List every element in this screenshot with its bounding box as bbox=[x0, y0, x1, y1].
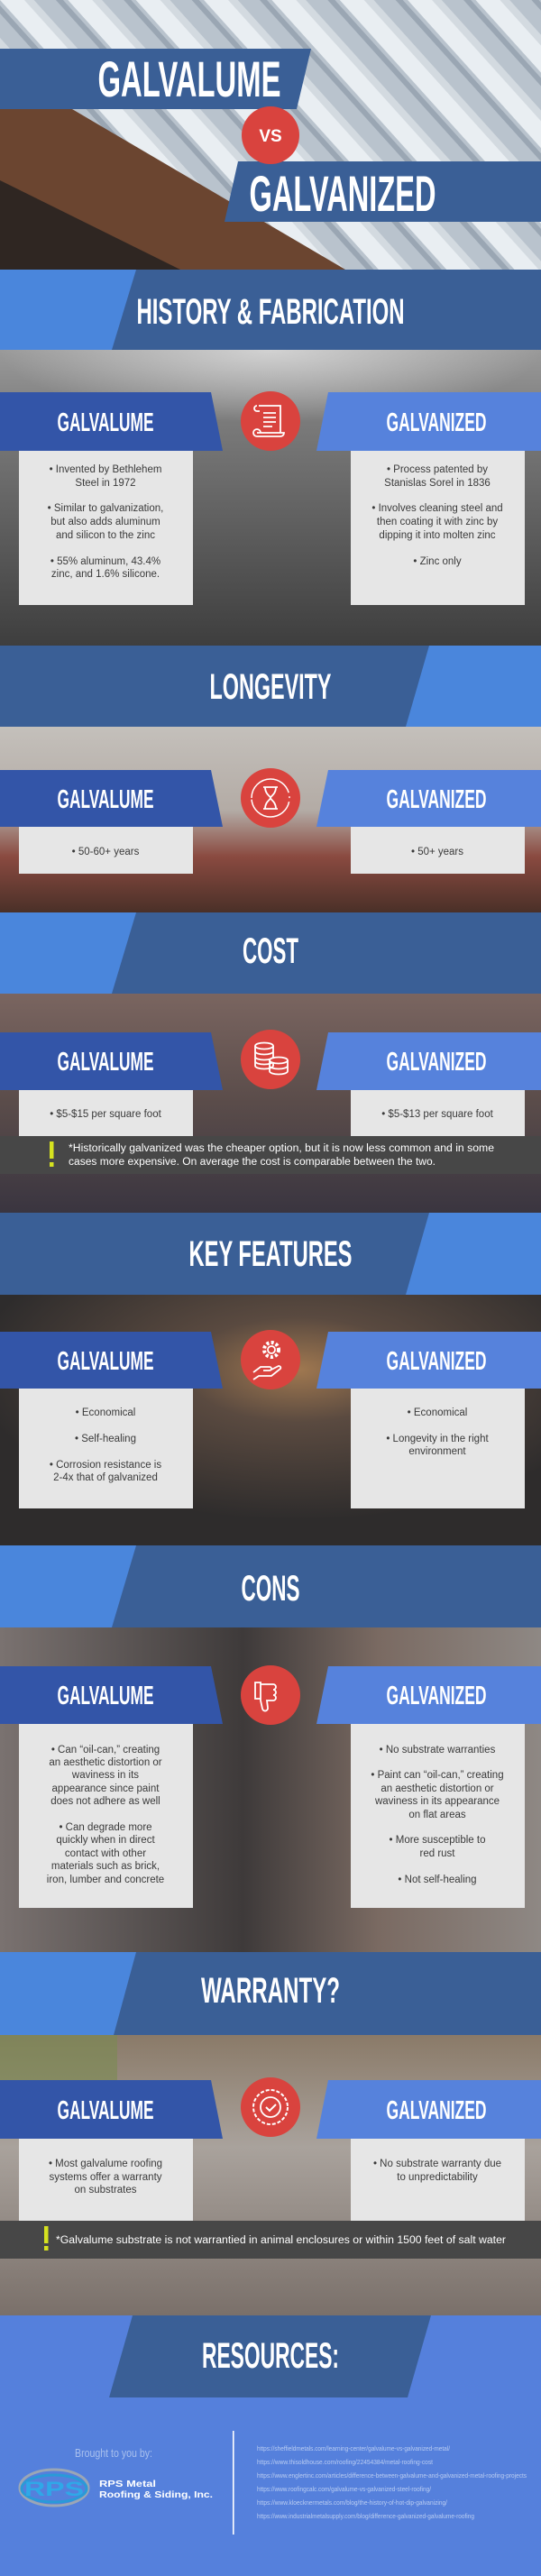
text box: galvalume longevity: • 50-60+ years bbox=[72, 847, 140, 857]
banner: galvanized bbox=[316, 2080, 541, 2139]
callout: cost note: *Historically galvanized was the cheaper option, but it is now less common and in some bbox=[69, 1143, 494, 1154]
callout: cost note bbox=[0, 1136, 541, 1174]
text box: galvalume history bbox=[19, 451, 193, 605]
header: longevity: LONGEVITY bbox=[209, 667, 332, 707]
banner: galvanized bbox=[316, 1032, 541, 1090]
text box: galvalume warranty: • Most galvalume roofing bbox=[49, 2159, 162, 2169]
icon: coins bbox=[241, 1030, 300, 1089]
text box: galvanized cons: on flat areas bbox=[408, 1810, 466, 1820]
icon: RPS logo: RPS bbox=[24, 2478, 84, 2500]
icon: RPS logo bbox=[20, 2470, 88, 2506]
text: company name: Roofing & Siding, Inc. bbox=[99, 2490, 213, 2500]
text box: galvalume features: • Self-healing bbox=[75, 1434, 136, 1444]
text box: galvalume cons: waviness in its bbox=[71, 1770, 139, 1781]
banner: galvalume: GALVALUME bbox=[58, 785, 153, 814]
text box: galvalume features bbox=[19, 1389, 193, 1508]
text box: galvalume warranty: on substrates bbox=[74, 2185, 137, 2196]
panel: cons bbox=[0, 1627, 541, 1952]
text box: galvalume features: • Economical bbox=[76, 1407, 135, 1418]
banner: galvalume bbox=[0, 1032, 223, 1090]
text box: galvanized features bbox=[351, 1389, 525, 1508]
text box: galvanized history: • Process patented by bbox=[387, 464, 488, 475]
text box: galvanized history: • Zinc only bbox=[413, 556, 462, 567]
list: resource urls: https://sheffieldmetals.com/learning-center/galvalume-vs-galvanized-metal/ bbox=[257, 2446, 450, 2452]
panel: cost bbox=[0, 994, 541, 1213]
text box: galvalume longevity bbox=[19, 827, 193, 874]
text box: galvalume warranty bbox=[19, 2139, 193, 2221]
list: resource urls: https://www.roofingcalc.com/galvalume-vs-galvanized-steel-roofing/ bbox=[257, 2487, 431, 2493]
header: resources bbox=[0, 2315, 541, 2576]
banner: galvanized bbox=[316, 770, 541, 827]
text box: galvalume cons: materials such as brick, bbox=[51, 1861, 160, 1872]
text box: galvalume cost: • $5-$15 per square foot bbox=[50, 1109, 162, 1120]
text box: galvalume cons: iron, lumber and concrete bbox=[47, 1875, 164, 1885]
banner: galvalume: GALVALUME bbox=[58, 1682, 153, 1710]
footer: brought to you by bbox=[20, 2446, 213, 2506]
text box: galvanized history: Stanislas Sorel in 1836 bbox=[384, 478, 491, 489]
text box: galvalume history: Steel in 1972 bbox=[75, 478, 136, 489]
icon: thumbs down bbox=[241, 1665, 300, 1725]
text box: galvalume history: but also adds aluminum bbox=[50, 517, 160, 527]
banner: galvalume: GALVALUME bbox=[58, 1347, 153, 1376]
vs badge bbox=[242, 106, 299, 164]
banner: galvalume: GALVALUME bbox=[58, 408, 153, 437]
header: history & fabrication bbox=[0, 270, 541, 350]
text box: galvanized history: dipping it into molten zinc bbox=[379, 530, 496, 541]
callout: warranty note bbox=[0, 2221, 541, 2259]
text box: galvalume cons: contact with other bbox=[65, 1848, 146, 1859]
list: resource urls: https://www.kloecknermetals.com/blog/the-history-of-hot-dip-galvanizing/ bbox=[257, 2500, 447, 2507]
text box: galvalume features: 2-4x that of galvanized bbox=[53, 1472, 158, 1483]
banner: galvalume: GALVALUME bbox=[58, 2096, 153, 2125]
panel: history bbox=[0, 350, 541, 646]
header: cons: CONS bbox=[242, 1569, 299, 1609]
list: resource urls bbox=[257, 2446, 527, 2520]
callout: cost note: cases more expensive. On average the cost is comparable between the two. bbox=[69, 1157, 436, 1168]
text box: galvanized cost bbox=[351, 1090, 525, 1136]
banner: galvanized bbox=[316, 392, 541, 451]
text box: galvanized cost: • $5-$13 per square foot bbox=[381, 1109, 494, 1120]
text box: galvanized features: environment bbox=[408, 1446, 466, 1457]
text box: galvalume history: • 55% aluminum, 43.4% bbox=[50, 556, 160, 567]
text box: galvalume history: • Invented by Bethlehem bbox=[50, 464, 161, 475]
text box: galvalume cons: appearance since paint bbox=[52, 1783, 160, 1794]
text box: galvanized cons: an aesthetic distortion or bbox=[381, 1783, 494, 1794]
banner: galvalume bbox=[0, 392, 223, 451]
banner: galvalume bbox=[0, 1666, 223, 1724]
icon: scroll bbox=[241, 391, 300, 451]
text box: galvalume history: • Similar to galvanization, bbox=[48, 503, 163, 514]
text box: galvalume warranty: systems offer a warranty bbox=[49, 2172, 162, 2183]
text box: galvalume cons: quickly when in direct bbox=[56, 1835, 155, 1846]
text box: galvanized features: • Longevity in the right bbox=[386, 1434, 489, 1444]
text box: galvanized cons: red rust bbox=[420, 1848, 455, 1859]
text box: galvanized history bbox=[351, 451, 525, 605]
list: resource urls: https://www.englertinc.com/articles/difference-between-galvalume-and-galvanized-metal-roofing-projects bbox=[257, 2473, 527, 2480]
header: warranty: WARRANTY? bbox=[201, 1971, 340, 2011]
header: warranty bbox=[0, 1952, 541, 2035]
text box: galvalume history: zinc, and 1.6% silicone. bbox=[51, 569, 160, 580]
header: key features: KEY FEATURES bbox=[189, 1234, 352, 1274]
text box: galvanized warranty: to unpredictability bbox=[397, 2172, 478, 2183]
list: resource urls: https://www.thisoldhouse.com/roofing/22454384/metal-roofing-cost bbox=[257, 2460, 433, 2466]
text: company name: RPS Metal bbox=[99, 2480, 156, 2489]
text: company name bbox=[99, 2480, 213, 2500]
banner: galvanized bbox=[316, 1332, 541, 1389]
text box: galvalume history: and silicon to the zinc bbox=[56, 530, 155, 541]
callout: warranty note: *Galvalume substrate is not warrantied in animal enclosures or within 1500 feet of salt water bbox=[56, 2235, 506, 2246]
text box: galvanized cons: • More susceptible to bbox=[390, 1835, 485, 1846]
banner: galvalume bbox=[0, 1332, 223, 1389]
header: longevity bbox=[0, 646, 541, 727]
banner: galvalume: GALVALUME bbox=[58, 1048, 153, 1077]
text box: galvanized cons: • Paint can “oil-can,” creating bbox=[371, 1770, 504, 1781]
banner: galvalume bbox=[0, 2080, 223, 2139]
panel: warranty bbox=[0, 2035, 541, 2315]
list: resource urls: https://www.industrialmetalsupply.com/blog/difference-galvanized-galvalume-roofing bbox=[257, 2514, 474, 2520]
text box: galvanized cons: waviness in its appearance bbox=[374, 1796, 500, 1807]
header: resources: RESOURCES: bbox=[202, 2336, 339, 2376]
text box: galvalume cons: does not adhere as well bbox=[50, 1796, 160, 1807]
text box: galvanized cons bbox=[351, 1724, 525, 1908]
header: cons bbox=[0, 1545, 541, 1627]
icon: hourglass bbox=[241, 768, 300, 828]
panel: key features bbox=[0, 1295, 541, 1545]
text box: galvanized longevity: • 50+ years bbox=[411, 847, 463, 857]
hero: title banner bbox=[0, 0, 541, 270]
text box: galvanized warranty bbox=[351, 2139, 525, 2221]
text box: galvanized history: • Involves cleaning steel and bbox=[371, 503, 503, 514]
header: key features bbox=[0, 1213, 541, 1295]
text box: galvanized features: • Economical bbox=[408, 1407, 467, 1418]
text box: galvalume cons: • Can “oil-can,” creating bbox=[51, 1745, 160, 1756]
text box: galvanized history: then coating it with zinc by bbox=[377, 517, 498, 527]
icon: gear in hand bbox=[241, 1330, 300, 1389]
header: cost: COST bbox=[243, 931, 298, 971]
icon: badge check bbox=[241, 2077, 300, 2137]
vs badge: VS bbox=[259, 127, 282, 146]
banner: galvalume bbox=[0, 770, 223, 827]
banner: galvanized bbox=[316, 1666, 541, 1724]
text box: galvanized cons: • Not self-healing bbox=[398, 1875, 477, 1885]
text box: galvalume cons: an aesthetic distortion or bbox=[49, 1757, 162, 1768]
banner: galvalume title: GALVALUME bbox=[97, 50, 281, 107]
panel: longevity bbox=[0, 727, 541, 912]
text box: galvalume cons bbox=[19, 1724, 193, 1908]
header: cost bbox=[0, 912, 541, 994]
text box: galvanized warranty: • No substrate warranty due bbox=[373, 2159, 501, 2169]
text box: galvalume features: • Corrosion resistance is bbox=[50, 1460, 161, 1471]
text box: galvalume cost bbox=[19, 1090, 193, 1136]
text box: galvanized longevity bbox=[351, 827, 525, 874]
text box: galvanized cons: • No substrate warranties bbox=[380, 1745, 496, 1756]
banner: galvalume title bbox=[0, 49, 311, 109]
footer: brought to you by: Brought to you by: bbox=[75, 2446, 152, 2460]
text box: galvalume cons: • Can degrade more bbox=[59, 1822, 152, 1833]
